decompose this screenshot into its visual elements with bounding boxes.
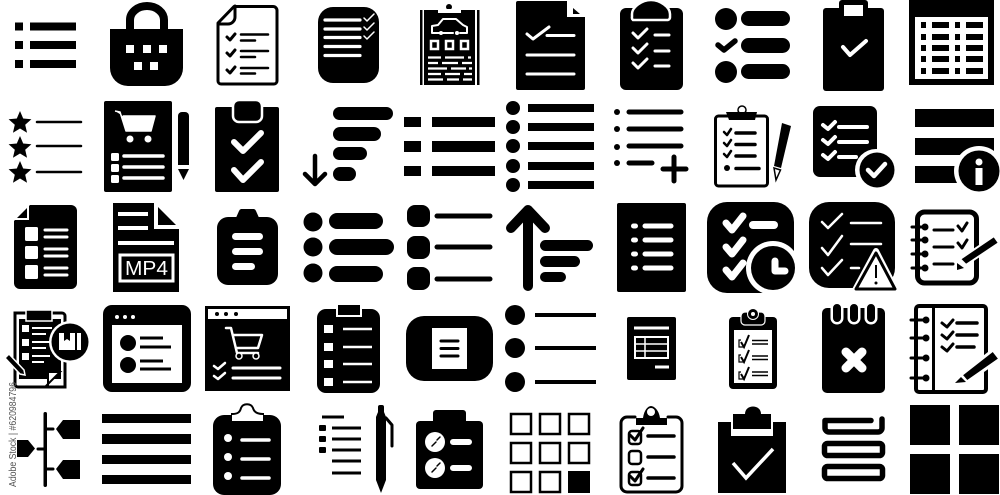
icon: four squares (910, 405, 999, 494)
icon: list with pen (319, 405, 392, 493)
icon: checklist with warning (809, 202, 896, 290)
icon: document with check (516, 0, 586, 90)
icon: spiral notebook with pencil (911, 306, 1000, 392)
icon: notebook with pencil (912, 212, 999, 283)
icon: document with checkboxes (13, 204, 77, 289)
icon: document with table (627, 317, 676, 380)
icon: large dots with thin lines (505, 305, 596, 392)
icon: inventory clipboard with box (5, 310, 91, 387)
icon: four-line menu (102, 414, 191, 484)
icon: document checklist outline (218, 6, 277, 84)
icon: browser window with cart (205, 306, 290, 391)
icon: browser window with list (103, 305, 191, 392)
icon: rounded clipboard (217, 209, 278, 285)
icon: sort descending (305, 107, 393, 184)
icon: clipboard with tall check (718, 406, 786, 493)
icon: tablet with document (406, 316, 493, 381)
icon: shopping bag (110, 6, 183, 86)
icon: clipboard with two checks (215, 100, 279, 192)
icon: checklist with clock (707, 202, 800, 295)
icon: thick list (404, 117, 495, 176)
icon: list information (915, 109, 1000, 196)
icon: clipboard with dots (213, 404, 281, 495)
icon: document approved (813, 106, 897, 191)
icon: tree diagram with tags (17, 412, 80, 487)
icon: shopping list with pencil (104, 101, 189, 192)
icon: square bullet list (15, 22, 76, 68)
icon: notepad with cross (822, 308, 885, 393)
watermark text: Adobe Stock | #620984796 (8, 382, 19, 487)
icon: star list (9, 111, 81, 183)
icon: car inspection clipboard (420, 4, 480, 85)
icon: nine-square grid (511, 414, 590, 493)
icon: clipboard outline with pencil (716, 106, 791, 186)
icon: list document (617, 203, 686, 292)
icon: bold pill list (304, 212, 394, 282)
icon: clipboard with checkboxes (729, 308, 777, 389)
icon: pill list with check (715, 8, 790, 83)
icon: clipboard with three checks (620, 0, 683, 90)
icon: table sheet (909, 0, 994, 85)
icon: clipboard outline with checkboxes (621, 406, 682, 492)
icon: outlined stacked bars (824, 419, 882, 478)
icon: add to list (614, 109, 686, 181)
icon: sort ascending (511, 210, 593, 286)
icon: rounded bullets with lines (407, 205, 490, 290)
icon: clipboard with single check (823, 0, 884, 91)
icon: clipboard with two tokens (416, 410, 483, 489)
icon: MP4 file: MP4 (125, 258, 168, 280)
icon: clipboard with box list (317, 304, 380, 393)
icon: circle bullet list (506, 101, 594, 192)
icon: tablet with ticked lines (318, 7, 379, 83)
icon: MP4 file (113, 203, 179, 292)
